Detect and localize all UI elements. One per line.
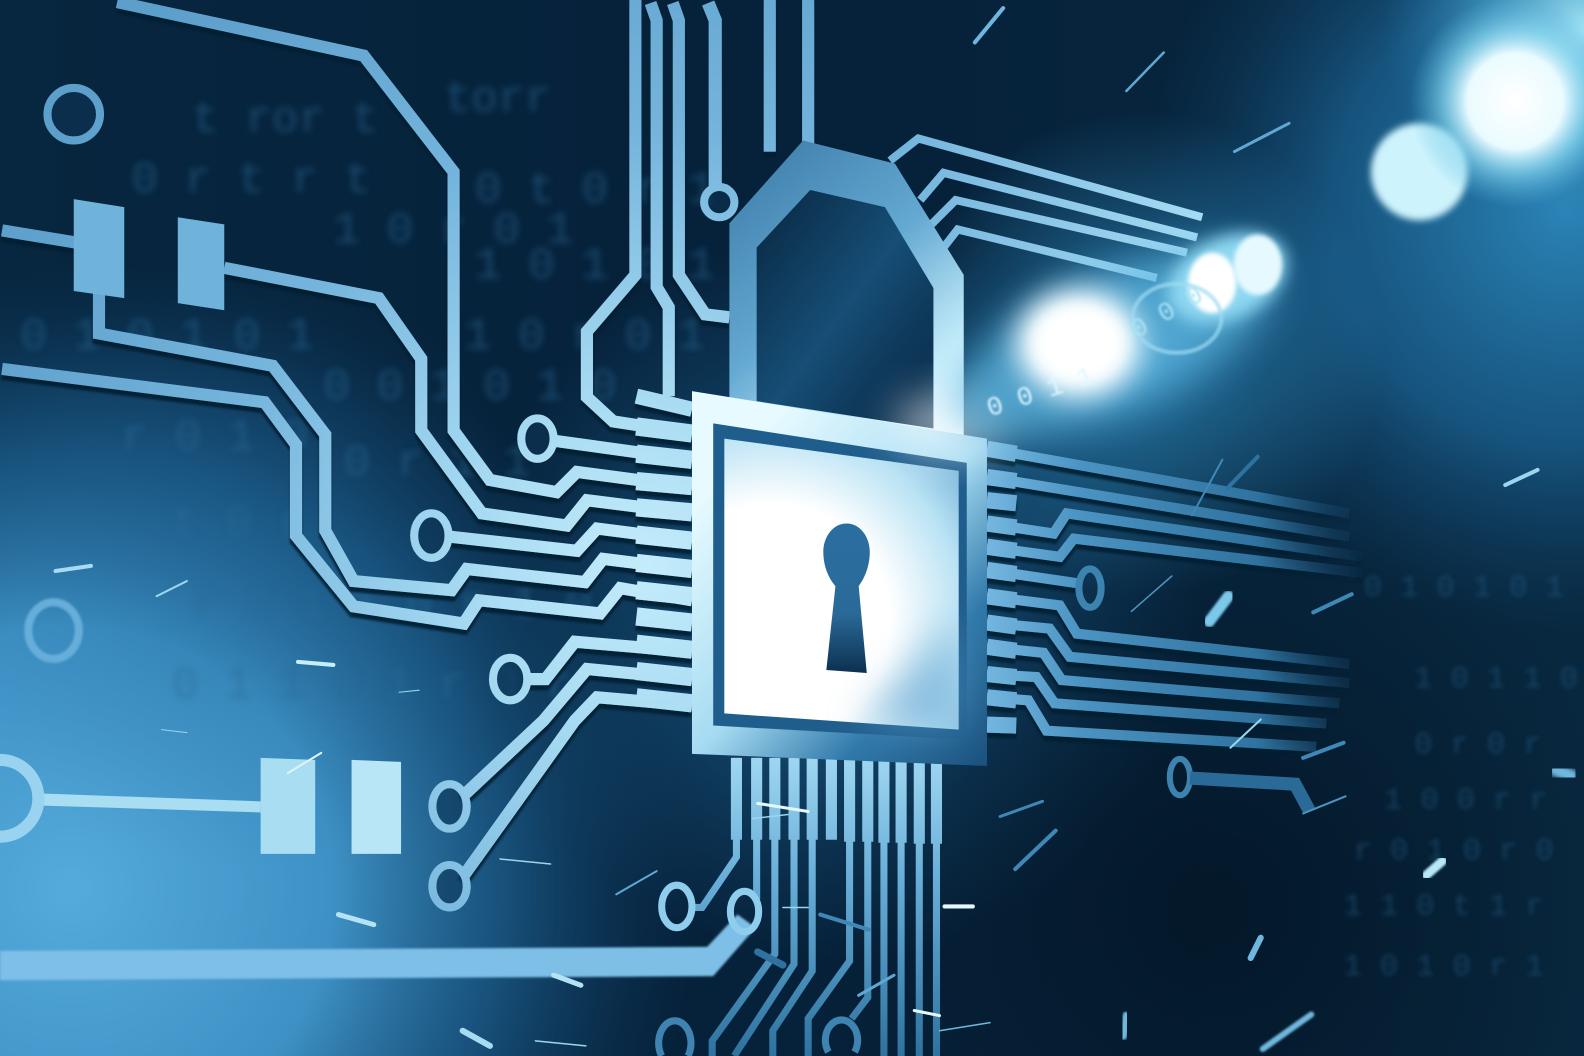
contact pads and connector, lower left bbox=[0, 758, 401, 854]
body inner panel bbox=[724, 439, 959, 730]
background binary digits: 0 1 1 0 1 r 0 r bbox=[172, 661, 572, 711]
background binary digits: t ror t bbox=[192, 95, 379, 145]
background binary digits: 0 t 0 r 1 bbox=[475, 166, 715, 216]
background binary digits bbox=[20, 75, 768, 711]
background binary digits: r t 1 1 0 r 1 0 bbox=[192, 580, 592, 630]
left circuit traces bbox=[2, 0, 808, 877]
padlock bbox=[692, 140, 987, 766]
right side binary digits bbox=[1344, 572, 1578, 985]
right side binary digits: r 0 1 0 r 0 bbox=[1354, 835, 1554, 869]
right side binary digits: 0 r 0 r bbox=[1414, 729, 1542, 763]
background binary digits: 0 r t r t bbox=[131, 156, 371, 206]
right side binary digits: 1 0 1 1 0 bbox=[1414, 663, 1578, 697]
background binary digits: t 0 r bbox=[172, 500, 305, 550]
bottom pins and traces bbox=[689, 758, 936, 1056]
background binary digits: torr bbox=[444, 75, 551, 125]
shackle opening bbox=[757, 190, 933, 428]
padlock shackle bbox=[729, 140, 964, 441]
right side binary digits: 0 1 0 1 0 1 bbox=[1364, 572, 1564, 606]
background binary digits: r 0 1 0 bbox=[121, 414, 308, 464]
lower right shading bbox=[859, 616, 959, 730]
background binary digits: 1 0 r 0 1 bbox=[333, 207, 573, 257]
bottom node rings bbox=[659, 885, 858, 1056]
keyhole bbox=[823, 523, 870, 673]
right side binary digits: 1 0 0 r r bbox=[1384, 784, 1548, 818]
glow around lock bbox=[894, 394, 1005, 455]
circuit node rings, left bbox=[28, 88, 734, 907]
right side binary digits: 1 1 0 t 1 r bbox=[1344, 891, 1544, 925]
contact pads, upper left bbox=[74, 199, 224, 310]
bright binary digits: 0 0 0 bbox=[1125, 280, 1209, 345]
bottom thick trace bbox=[0, 915, 756, 980]
background binary digits: 0 0 1 0 1 0 bbox=[323, 363, 617, 413]
padlock body bbox=[692, 391, 987, 766]
bright binary digits: 0 0 1 1 bbox=[983, 361, 1097, 424]
body inset frame bbox=[713, 423, 967, 740]
trace from top left bbox=[117, 2, 692, 492]
upper right circuit traces bbox=[890, 138, 1202, 278]
background binary digits: 0 r 1 1 bbox=[343, 439, 530, 489]
lower right ring and trace bbox=[1079, 569, 1309, 810]
background binary digits: 0 1 0 1 0 1 bbox=[20, 313, 314, 363]
lens flares, centre bbox=[927, 213, 1301, 474]
background binary digits: 1 0 1 0 1 1 bbox=[475, 242, 768, 292]
background binary digits: 1 0 r 0 1 bbox=[465, 313, 705, 363]
lens flares, top right bbox=[1371, 0, 1584, 220]
right circuit traces bbox=[987, 449, 1363, 747]
right side binary digits: 1 0 1 0 r 1 bbox=[1344, 951, 1544, 985]
bright binary digits bbox=[983, 280, 1209, 424]
